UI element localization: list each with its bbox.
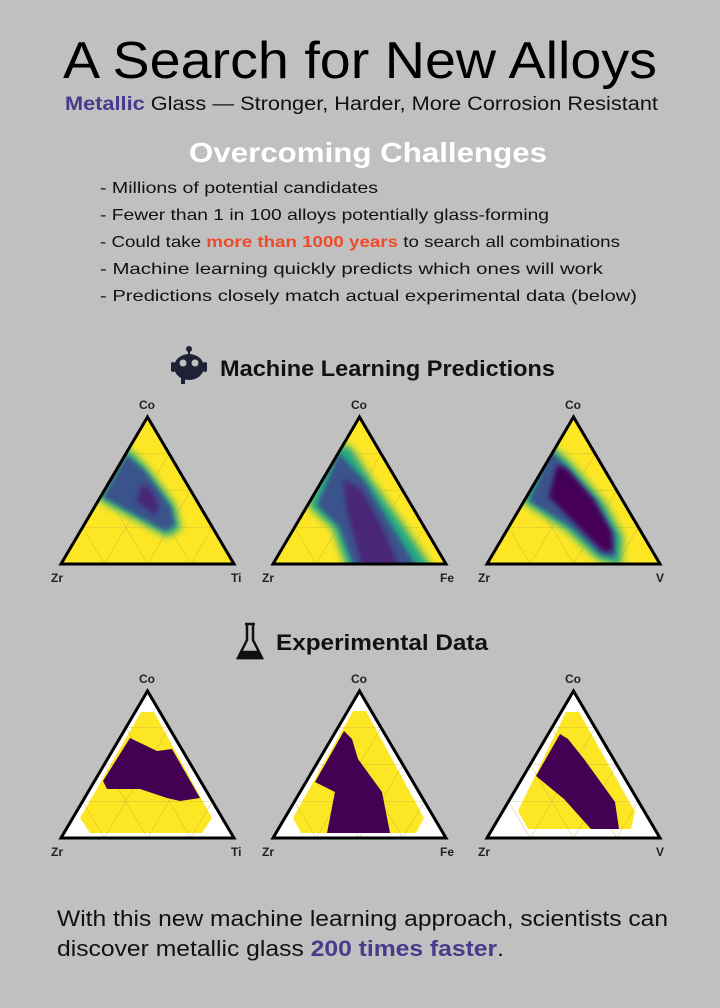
axis labels: predictions: Zr [51,571,63,585]
axis labels: experiments: V [656,845,664,859]
axis labels: experiments: Zr [478,845,490,859]
footer text [57,906,668,961]
axis labels: experiments: Co [351,672,367,686]
icon: flask [238,624,262,658]
chart: prediction Zr-Co-Ti [61,417,236,567]
axis labels: predictions: Co [351,398,367,412]
subtitle: Metallic Glass — Stronger, Harder, More Corrosion Resistant [65,94,659,115]
chart: prediction Zr-Co-Fe [273,417,448,569]
axis labels: predictions: Co [565,398,581,412]
bullet list: - Predictions closely match actual experimental data (below) [100,288,637,305]
bullet list: - Fewer than 1 in 100 alloys potentially glass-forming [100,207,549,224]
chart: experiment Zr-Co-Fe [273,691,446,838]
bullet list: - Could take more than 1000 years to search all combinations [100,234,620,251]
heading: overcoming challenges: Overcoming Challenges [189,137,547,168]
axis labels: experiments [51,672,664,859]
chart: prediction Zr-Co-V [487,417,662,567]
axis labels: predictions [51,398,664,585]
axis labels: experiments: Fe [440,845,454,859]
axis labels: predictions: V [656,571,664,585]
axis labels: experiments: Co [139,672,155,686]
axis labels: experiments: Co [565,672,581,686]
axis labels: predictions: Ti [231,571,241,585]
chart: experiment Zr-Co-Ti [61,691,234,838]
chart: experiment Zr-Co-V [487,691,660,838]
heading: experimental data: Experimental Data [276,630,489,655]
bullet list: - Machine learning quickly predicts which ones will work [100,261,604,278]
axis labels: predictions: Zr [478,571,490,585]
axis labels: experiments: Zr [262,845,274,859]
title: A Search for New Alloys [63,32,657,90]
axis labels: predictions: Co [139,398,155,412]
footer text: With this new machine learning approach, scientists can [57,906,668,931]
bullet list [100,180,637,305]
axis labels: predictions: Fe [440,571,454,585]
axis labels: predictions: Zr [262,571,274,585]
axis labels: experiments: Ti [231,845,241,859]
bullet list: - Millions of potential candidates [100,180,378,197]
axis labels: experiments: Zr [51,845,63,859]
icon: robot [171,346,207,384]
heading: machine learning predictions: Machine Learning Predictions [220,356,555,381]
footer text: discover metallic glass 200 times faster . [57,936,504,961]
